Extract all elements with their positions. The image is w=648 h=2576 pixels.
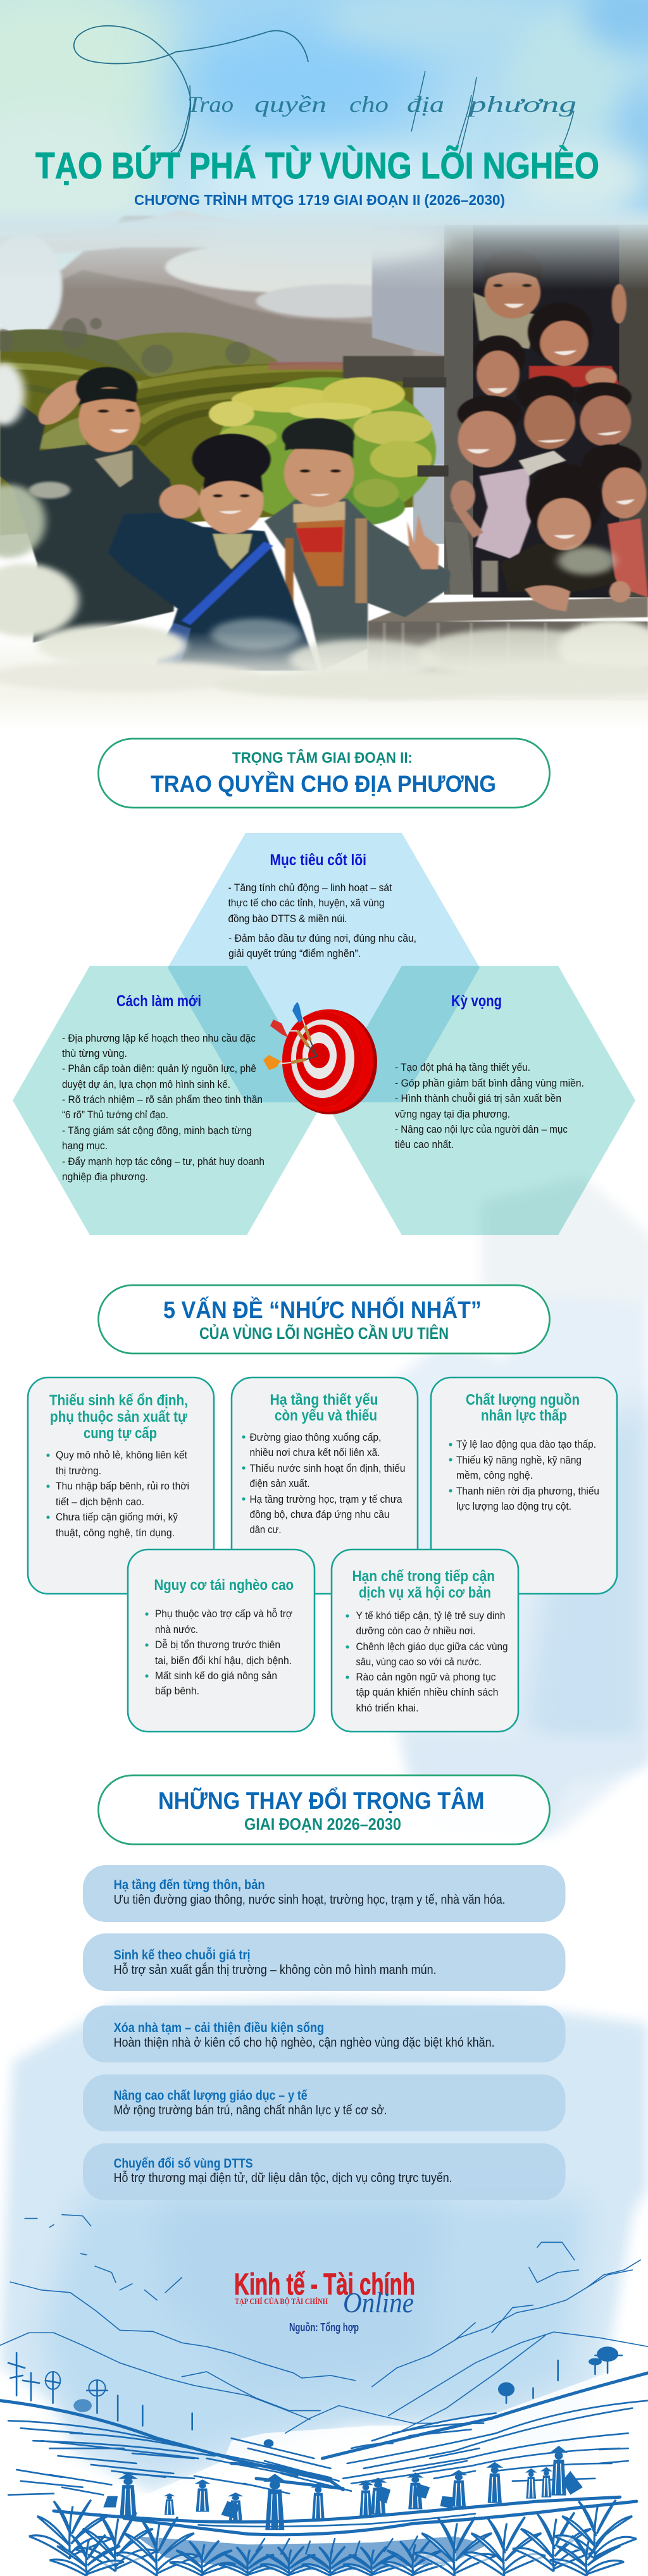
panel: hexagon Cách làm mới: hạng mục. (62, 1140, 108, 1152)
boy middle with beret (108, 434, 318, 671)
panel: hexagon Cách làm mới: nghiệp địa phương. (62, 1171, 148, 1183)
dart: blue (292, 1002, 317, 1056)
panel: hexagon Kỳ vọng: Kỳ vọng (451, 992, 502, 1010)
subtitle: CHƯƠNG TRÌNH MTQG 1719 GIAI ĐOẠN II (2026–2030) (134, 191, 505, 208)
script headline: cho (349, 92, 389, 117)
panel: hexagon Mục tiêu cốt lõi: đồng bào DTTS & miền núi. (228, 913, 347, 925)
panel: hexagon Kỳ vọng: - Góp phần giảm bất bình đẳng vùng miền. (395, 1077, 584, 1089)
card: Nguy cơ tái nghèo: nhà nước. (155, 1624, 198, 1636)
card: Thiếu sinh kế (28, 1377, 214, 1594)
panel: hexagon Mục tiêu cốt lõi: - Tăng tính chủ động – linh hoạt – sát (228, 882, 392, 894)
card: Nguy cơ tái nghèo: Phụ thuộc vào trợ cấp và hỗ trợ (155, 1608, 292, 1620)
pill: Sinh kế theo chuỗi giá trị (83, 1933, 566, 1991)
ridge lines (0, 2215, 648, 2433)
child left pink shirt (451, 395, 531, 592)
card: Nguy cơ tái nghèo (128, 1550, 315, 1732)
card: Chất lượng nguồn nhân lực: lực lượng lao động trụ cột. (456, 1500, 571, 1512)
field rows (54, 2497, 637, 2570)
logo: Kinh tế - Tài chính Online (234, 2268, 415, 2319)
card: Hạ tầng thiết yếu: dân cư. (249, 1524, 281, 1536)
script headline: quyền (254, 92, 327, 117)
card: Hạ tầng thiết yếu: Thiếu nước sinh hoạt ổn định, thiếu (249, 1462, 405, 1474)
terraces right (322, 2373, 648, 2484)
card: Hạn chế tiếp cận dịch vụ: dịch vụ xã hội cơ bản (359, 1584, 491, 1601)
card: Thiếu sinh kế: thuật, công nghệ, tín dụng. (56, 1527, 175, 1539)
window beam (343, 356, 449, 381)
panel: hexagon Cách làm mới: - Tăng giám sát cộng đồng, minh bạch từng (62, 1125, 252, 1137)
card: Hạ tầng thiết yếu: Đường giao thông xuống cấp, (249, 1431, 381, 1443)
child right back (582, 445, 648, 598)
panel: hexagon Cách làm mới: - Địa phương lập kế hoạch theo nhu cầu đặc (62, 1032, 256, 1044)
panel: hexagon Mục tiêu cốt lõi: thực tế cho các tỉnh, huyện, xã vùng (228, 897, 385, 909)
dart: red (270, 1020, 317, 1056)
card: Hạn chế tiếp cận dịch vụ: Rào cản ngôn ngữ và phong tục (356, 1671, 496, 1683)
pill: Hạ tầng đến từng thôn, bản: Hạ tầng đến từng thôn, bản (114, 1878, 265, 1892)
card: Thiếu sinh kế: thị trường. (56, 1465, 101, 1477)
panel: hexagon Mục tiêu cốt lõi: - Đảm bảo đầu tư đúng nơi, đúng nhu cầu, (228, 932, 416, 944)
panel: hexagon Cách làm mới: Cách làm mới (116, 992, 201, 1010)
section header: 5 vấn đề (99, 1285, 549, 1353)
card: Hạ tầng thiết yếu: đồng bộ, chưa đáp ứng nhu cầu (249, 1508, 390, 1520)
panel: hexagon Mục tiêu cốt lõi: giải quyết trúng “điểm nghẽn”. (228, 947, 361, 959)
section header: Trọng tâm giai đoạn II: TRỌNG TÂM GIAI ĐOẠN II: (232, 749, 413, 767)
pill: Hạ tầng đến từng thôn, bản (83, 1865, 566, 1922)
panel: hexagon Cách làm mới: - Đẩy mạnh hợp tác công – tư, phát huy doanh (62, 1156, 265, 1168)
card: Hạn chế tiếp cận dịch vụ: Hạn chế trong tiếp cận (352, 1568, 495, 1585)
panel: hexagon Cách làm mới: “6 rõ” Thủ tướng chỉ đạo. (62, 1109, 168, 1121)
panel: hexagon Kỳ vọng (325, 966, 635, 1235)
pill: Hạ tầng đến từng thôn, bản: Ưu tiên đường giao thông, nước sinh hoạt, trường học, trạm y tế, nhà văn hóa. (114, 1892, 506, 1907)
farmers walking (103, 2446, 583, 2530)
logo: Kinh tế - Tài chính Online: TẠP CHÍ CỦA BỘ TÀI CHÍNH (235, 2297, 328, 2306)
hero photo: children of the highlands (drawn) (0, 205, 648, 730)
card: Hạ tầng thiết yếu: Hạ tầng trường học, trạm y tế chưa (249, 1493, 402, 1505)
script headline (74, 26, 576, 157)
people on the hill (269, 362, 347, 369)
card: Thiếu sinh kế: tiết – dịch bệnh cao. (56, 1496, 144, 1508)
pill: Sinh kế theo chuỗi giá trị: Sinh kế theo chuỗi giá trị (114, 1947, 251, 1963)
card: Hạn chế tiếp cận dịch vụ: sâu, vùng cao so với cả nước. (356, 1656, 482, 1668)
boy right with V-sign (265, 418, 451, 671)
panel: hexagon Kỳ vọng: - Tạo đột phá hạ tầng thiết yếu. (395, 1061, 530, 1073)
card: Chất lượng nguồn nhân lực: nhân lực thấp (481, 1407, 567, 1424)
pill: Nâng cao chất lượng giáo dục: Nâng cao chất lượng giáo dục – y tế (114, 2088, 308, 2103)
card: Chất lượng nguồn nhân lực: Tỷ lệ lao động qua đào tạo thấp. (456, 1438, 596, 1450)
card: Hạn chế tiếp cận dịch vụ: tập quán khiến nhiều chính sách (356, 1686, 499, 1698)
pill: Sinh kế theo chuỗi giá trị: Hỗ trợ sản xuất gắn thị trường – không còn mô hình manh mún. (114, 1963, 437, 1977)
sill and planks (368, 598, 648, 701)
pill: Nâng cao chất lượng giáo dục (83, 2074, 566, 2131)
card: Nguy cơ tái nghèo: Dễ bị tổn thương trước thiên (155, 1639, 280, 1651)
card: Hạn chế tiếp cận dịch vụ (332, 1550, 518, 1732)
pill: Chuyển đổi số (83, 2143, 566, 2200)
card: Thiếu sinh kế: Quy mô nhỏ lẻ, không liên kết (56, 1449, 187, 1461)
white valley clearing (0, 2358, 648, 2576)
child third (473, 335, 525, 398)
section header: Những thay đổi trọng tâm: NHỮNG THAY ĐỔI TRỌNG TÂM (158, 1786, 485, 1815)
girl front (500, 464, 631, 612)
panel: hexagon Cách làm mới: thù từng vùng. (62, 1047, 127, 1059)
card: Hạ tầng thiết yếu: Hạ tầng thiết yếu (270, 1391, 378, 1408)
children middle (516, 376, 632, 449)
section header: Trọng tâm giai đoạn II: TRAO QUYỀN CHO ĐỊA PHƯƠNG (151, 771, 496, 797)
card: Hạ tầng thiết yếu: nhiều nơi chưa kết nối liên xã. (249, 1446, 380, 1458)
pill: Nâng cao chất lượng giáo dục: Mở rộng trường bán trú, nâng chất nhân lực y tế cơ sở. (114, 2103, 387, 2117)
card: Chất lượng nguồn nhân lực: Thiếu kỹ năng nghề, kỹ năng (456, 1454, 582, 1466)
section header: 5 vấn đề: CỦA VÙNG LÕI NGHÈO CẦN ƯU TIÊN (199, 1323, 449, 1343)
panel: hexagon Kỳ vọng: vững ngay tại địa phương. (395, 1108, 510, 1120)
logo: Kinh tế - Tài chính Online: Kinh tế - Tài chính (234, 2268, 415, 2302)
icon: dartboard with three darts (263, 1002, 377, 1114)
pill: Xóa nhà tạm: Hoàn thiện nhà ở kiên cố cho hộ nghèo, cận nghèo vùng đặc biệt khó khăn. (114, 2035, 495, 2050)
card: Hạn chế tiếp cận dịch vụ: khó triển khai. (356, 1702, 419, 1714)
panel: hexagon Kỳ vọng: - Hình thành chuỗi giá trị sản xuất bền (395, 1092, 561, 1104)
dart: orange (263, 1055, 317, 1070)
card: Thiếu sinh kế: Thiếu sinh kế ổn định, (49, 1392, 188, 1409)
pill: Xóa nhà tạm: Xóa nhà tạm – cải thiện điều kiện sống (114, 2021, 324, 2035)
script headline: địa (407, 92, 444, 117)
tea hills (0, 330, 413, 535)
panel: hexagon Cách làm mới: duyệt dự án, lựa chọn mô hình sinh kế. (62, 1078, 230, 1090)
section header: Những thay đổi trọng tâm (99, 1775, 549, 1844)
corn plants (29, 2500, 637, 2576)
trees (0, 318, 250, 373)
panel: hexagon Cách làm mới (13, 966, 324, 1235)
white shirt child (519, 450, 566, 476)
panel: hexagon Mục tiêu cốt lõi (168, 833, 480, 1102)
card: Thiếu sinh kế: phụ thuộc sản xuất tự (50, 1408, 188, 1426)
card: Nguy cơ tái nghèo: Nguy cơ tái nghèo cao (154, 1577, 294, 1594)
panel: hexagon Kỳ vọng: - Nâng cao nội lực của người dân – mục (395, 1123, 568, 1135)
card: Nguy cơ tái nghèo: Mất sinh kế do giá nông sản (155, 1670, 277, 1682)
logo: Kinh tế - Tài chính Online: Online (343, 2286, 414, 2319)
card: Hạ tầng thiết yếu (232, 1377, 418, 1594)
card: Nguy cơ tái nghèo: bấp bênh. (155, 1685, 199, 1697)
yellow flower bush (209, 377, 436, 527)
section header: 5 vấn đề: 5 VẤN ĐỀ “NHỨC NHỐI NHẤT” (163, 1295, 482, 1324)
card: Chất lượng nguồn nhân lực: Thanh niên rời địa phương, thiếu (456, 1485, 599, 1497)
panel: hexagon Cách làm mới: - Rõ trách nhiệm – rõ sản phẩm theo tinh thần (62, 1094, 263, 1106)
card: Hạ tầng thiết yếu: điện sản xuất. (249, 1477, 310, 1489)
terraces left (0, 2401, 351, 2495)
boy left saluting (0, 367, 182, 643)
section header: Trọng tâm giai đoạn II (99, 739, 549, 808)
panel: hexagon Kỳ vọng: tiêu cao nhất. (395, 1138, 454, 1150)
group of children at the window (451, 250, 648, 612)
card: Nguy cơ tái nghèo: tai, biến đổi khí hậu, dịch bệnh. (155, 1655, 292, 1667)
distant misty mountains (0, 211, 446, 400)
kid top (473, 250, 542, 349)
section header: Những thay đổi trọng tâm: GIAI ĐOẠN 2026–2030 (244, 1815, 401, 1833)
window frame and posts (403, 225, 648, 598)
panel: hexagon Mục tiêu cốt lõi: Mục tiêu cốt lõi (270, 851, 366, 869)
card: Chất lượng nguồn nhân lực: Chất lượng nguồn (466, 1391, 580, 1408)
trees on slopes (8, 2346, 622, 2448)
card: Thiếu sinh kế: Thu nhập bấp bênh, rủi ro thời (56, 1480, 189, 1492)
pill: Chuyển đổi số: Hỗ trợ thương mại điện tử, dữ liệu dân tộc, dịch vụ công trực tuyến. (114, 2171, 452, 2185)
illustration: blue sketch of mountains and farmers (0, 2215, 648, 2576)
card: Hạ tầng thiết yếu: còn yếu và thiếu (275, 1407, 377, 1424)
script headline: phương (466, 92, 576, 117)
title block (35, 26, 599, 208)
background: watercolor wash (0, 1176, 648, 2492)
panel: hexagon Cách làm mới: - Phân cấp toàn diện: quản lý nguồn lực, phê (62, 1063, 256, 1075)
source credit: Nguồn: Tổng hợp (289, 2321, 359, 2334)
card: Chất lượng nguồn nhân lực (431, 1377, 617, 1594)
pill: Chuyển đổi số: Chuyển đổi số vùng DTTS (114, 2157, 253, 2171)
wall behind the bush (372, 225, 444, 355)
card: Hạn chế tiếp cận dịch vụ: dưỡng còn cao ở nhiều nơi. (356, 1625, 476, 1637)
girl upper (528, 284, 626, 388)
hero background: sky and clouds (0, 0, 648, 278)
card: Hạn chế tiếp cận dịch vụ: Chênh lệch giáo dục giữa các vùng (356, 1641, 508, 1653)
script headline: Trao (187, 92, 234, 117)
card: Hạn chế tiếp cận dịch vụ: Y tế khó tiếp cận, tỷ lệ trẻ suy dinh (356, 1610, 505, 1622)
card: Thiếu sinh kế: Chưa tiếp cận giống mới, kỹ (56, 1511, 178, 1523)
pill: Xóa nhà tạm (83, 2006, 566, 2062)
clouds over the photo (0, 205, 648, 730)
card: Thiếu sinh kế: cung tự cấp (84, 1425, 157, 1442)
card: Chất lượng nguồn nhân lực: mềm, công nghệ. (456, 1469, 533, 1481)
